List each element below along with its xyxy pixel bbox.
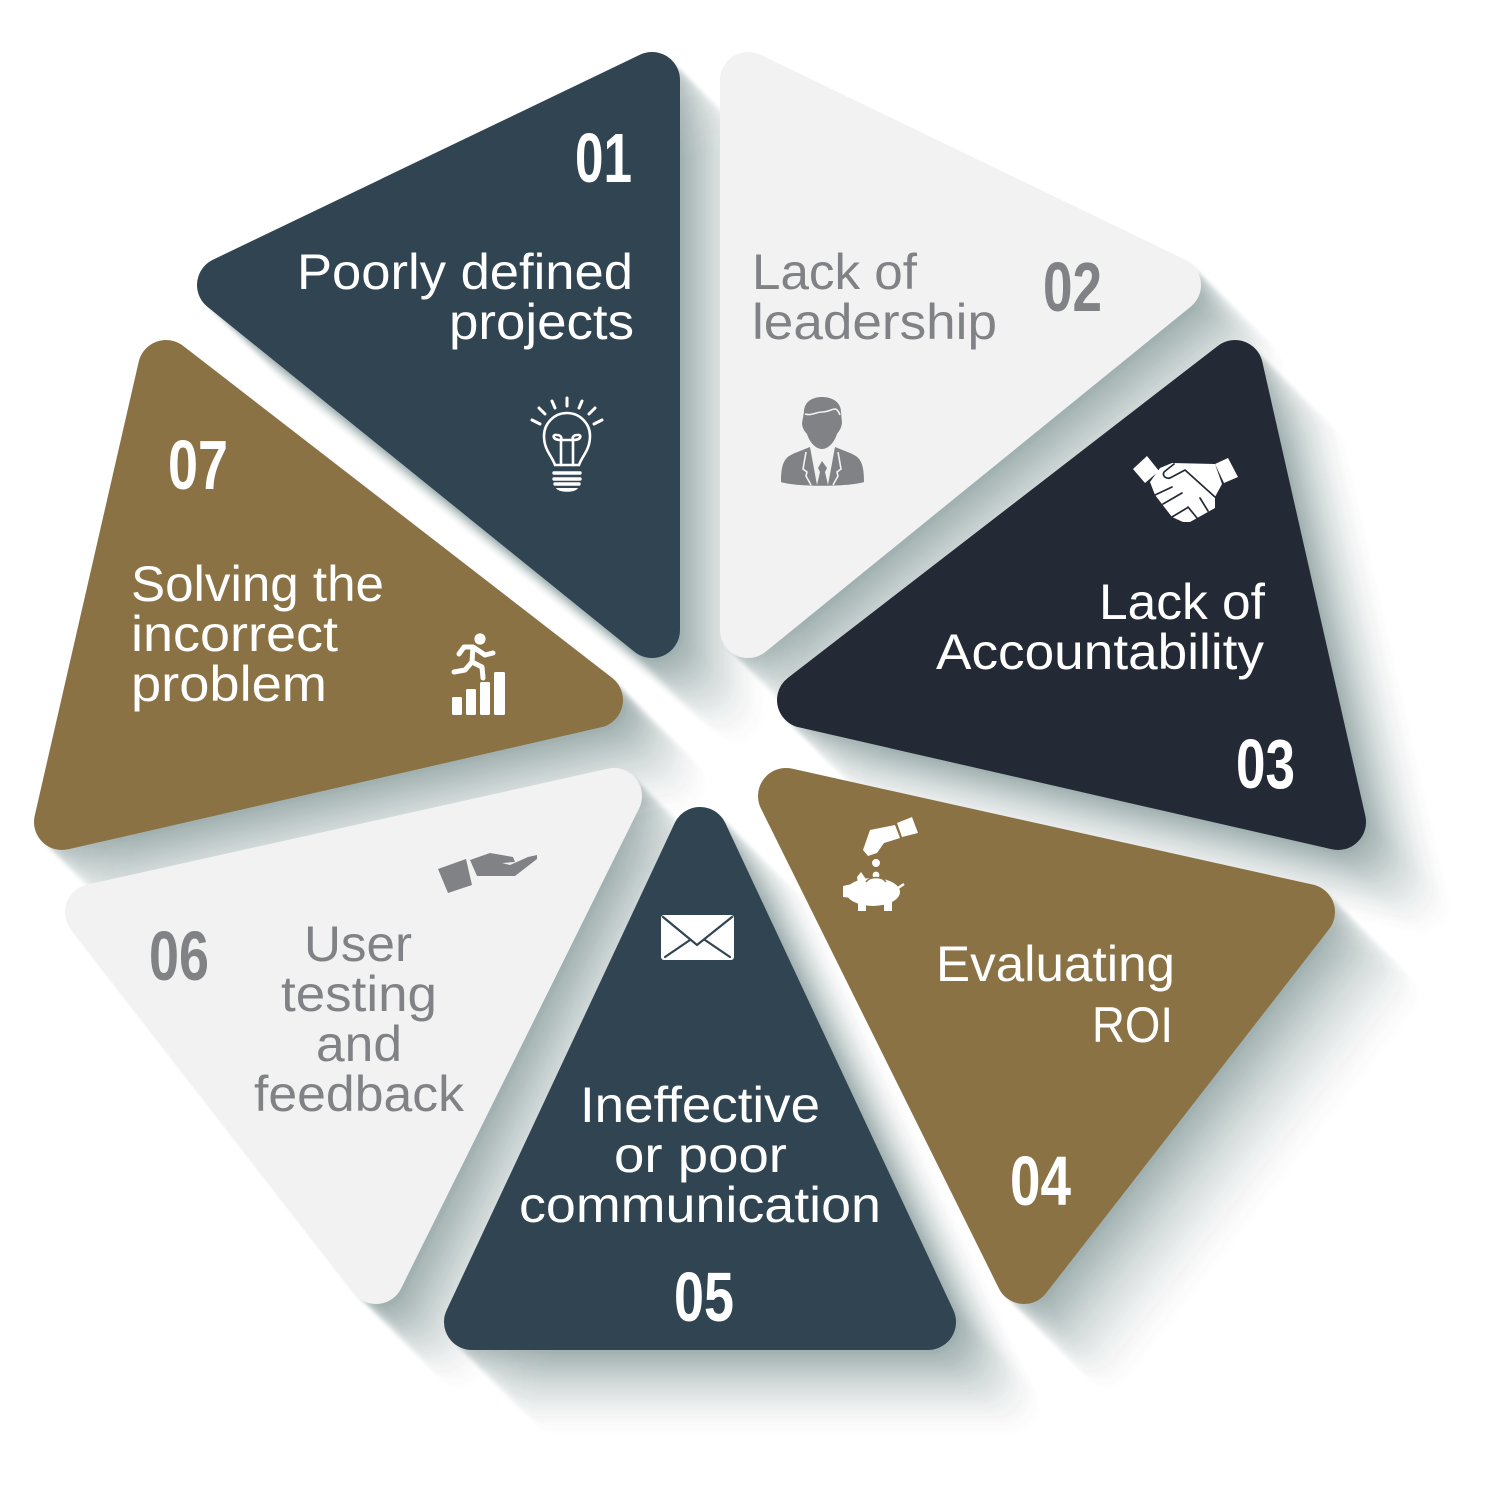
panel 6: user testing and feedback — [93, 796, 614, 1276]
panel 7: solving the incorrect problem — [62, 368, 595, 822]
heading 7: Solving the — [131, 556, 384, 612]
triangle 5 — [472, 835, 928, 1322]
heading 4: ROI — [1092, 997, 1173, 1053]
heading 3: Accountability — [936, 624, 1264, 680]
long shadow: panel 1 — [228, 83, 742, 720]
heading 4: Evaluating — [936, 936, 1175, 992]
panel 2: lack of leadership — [748, 80, 1173, 630]
triangle 2 — [748, 80, 1173, 630]
long shadow: panel 3 — [808, 371, 1428, 912]
icon: light bulb — [532, 398, 602, 492]
triangle 4 — [786, 796, 1307, 1276]
panel 1: poorly defined projects — [225, 80, 652, 630]
heading 3 — [936, 574, 1265, 680]
number 07: 07 — [168, 426, 228, 504]
long shadow: panel 4 — [789, 799, 1397, 1366]
number 04: 04 — [1010, 1142, 1071, 1220]
heading 5 — [519, 1077, 881, 1233]
panel 4: evaluating ROI — [786, 796, 1307, 1276]
heading 7 — [131, 556, 384, 712]
heading 5: Ineffective — [580, 1077, 820, 1133]
heading 3: Lack of — [1099, 574, 1265, 630]
number 03: 03 — [1236, 725, 1295, 803]
icon: hand and piggy bank — [843, 817, 918, 911]
heading 6: and — [316, 1016, 402, 1072]
heading 6: testing — [281, 966, 437, 1022]
number 01: 01 — [575, 119, 632, 197]
triangle 7 — [62, 368, 595, 822]
panel 3: lack of accountability — [805, 368, 1338, 822]
long shadow: panel 2 — [751, 83, 1263, 720]
icon: open hand — [438, 853, 537, 893]
heading 2 — [752, 244, 997, 350]
heading 1: projects — [449, 294, 634, 350]
icon: envelope — [661, 915, 734, 960]
icon: businessman — [781, 397, 864, 486]
heading 5: or poor — [614, 1127, 787, 1183]
heading 2: leadership — [752, 294, 997, 350]
triangle 1 — [225, 80, 652, 630]
heading 6 — [254, 916, 465, 1122]
heading 6: User — [304, 916, 412, 972]
heading 1 — [297, 244, 634, 350]
long shadow: panel 6 — [96, 799, 704, 1366]
heading 6: feedback — [254, 1066, 465, 1122]
heading 7: problem — [131, 656, 327, 712]
icon: handshake — [1133, 456, 1238, 522]
heading 4 — [936, 936, 1175, 1053]
heading 7: incorrect — [131, 606, 338, 662]
triangle 3 — [805, 368, 1338, 822]
heading 5: communication — [519, 1177, 881, 1233]
triangle 6 — [93, 796, 614, 1276]
number 06: 06 — [149, 917, 209, 995]
panel 5: ineffective or poor communication — [472, 835, 928, 1336]
long shadow: panel 5 — [475, 838, 1018, 1412]
icon: runner on rising bars — [452, 633, 505, 715]
long shadow: panel 7 — [65, 371, 685, 912]
number 02: 02 — [1043, 248, 1102, 326]
number 05: 05 — [674, 1258, 734, 1336]
heading 1: Poorly defined — [297, 244, 633, 300]
heading 2: Lack of — [752, 244, 917, 300]
